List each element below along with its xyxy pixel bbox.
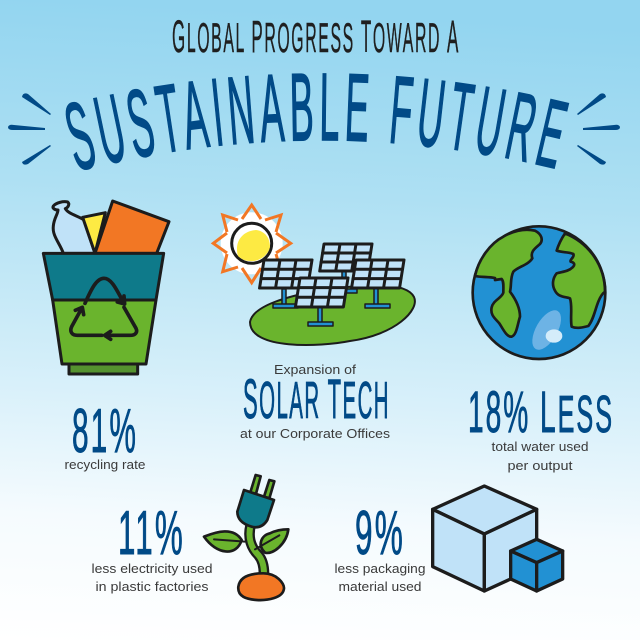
caption line 1: less electricity used (92, 562, 213, 576)
glacier bright (546, 329, 562, 343)
bin upper band (43, 253, 164, 300)
pole back (331, 270, 357, 293)
bin lower body (53, 300, 156, 364)
expansion of: Expansion of (274, 363, 357, 377)
icon: recycling bin (43, 201, 169, 374)
left leaf rib (214, 539, 245, 542)
icon: plug plant (204, 475, 288, 600)
icon: globe (473, 226, 605, 359)
caption line 2: per output (508, 459, 573, 473)
stat: solar tech (240, 363, 390, 441)
glacier light (526, 306, 567, 354)
plug prongs (250, 475, 261, 495)
solar panel right (352, 260, 404, 288)
caption: at our Corporate Offices (240, 427, 390, 441)
caption: recycling rate (64, 458, 146, 472)
decorative burst: left (8, 93, 51, 165)
stem (250, 525, 264, 574)
pole front (308, 307, 333, 326)
ground (250, 285, 415, 345)
caption line 1: less packaging (334, 562, 426, 576)
caption line 1: total water used (492, 440, 589, 454)
right leaf (261, 529, 288, 553)
small cube (511, 539, 563, 591)
orange paper (95, 201, 169, 253)
solar panel left (260, 260, 312, 288)
stat: recycling rate: 81% (72, 397, 138, 466)
stat: recycling rate (64, 397, 146, 472)
stat: water used (468, 380, 614, 473)
right land (553, 233, 605, 328)
yellow paper (83, 213, 105, 253)
decorative burst: right (577, 93, 620, 165)
title: global progress toward a: GLOBAL PROGRESS TOWARD A (172, 11, 460, 62)
11%: 11% (118, 499, 185, 568)
pole right (365, 287, 390, 308)
left leaf (204, 531, 242, 552)
ocean (473, 226, 605, 359)
large cube (433, 486, 537, 591)
icon: solar farm (213, 205, 415, 345)
soil mound (238, 573, 284, 600)
bin foot (69, 364, 138, 374)
title: sustainable future: SUSTAINABLE FUTURE (66, 73, 570, 170)
recycled bottle (53, 202, 95, 253)
solar tech heading: SOLAR TECH (243, 367, 390, 430)
left land (475, 230, 542, 337)
pole left (273, 289, 298, 308)
stat: electricity (92, 499, 213, 594)
recycle symbol (71, 278, 137, 339)
solar panel front (295, 278, 348, 307)
icon: packaging cubes (433, 486, 563, 591)
9%: 9% (355, 499, 405, 568)
sun (213, 205, 291, 283)
caption line 2: in plastic factories (96, 580, 208, 594)
solar panel back (320, 244, 372, 271)
stat: packaging (334, 499, 426, 594)
plug head (237, 490, 274, 527)
caption line 2: material used (338, 580, 422, 594)
right leaf rib (255, 535, 279, 549)
